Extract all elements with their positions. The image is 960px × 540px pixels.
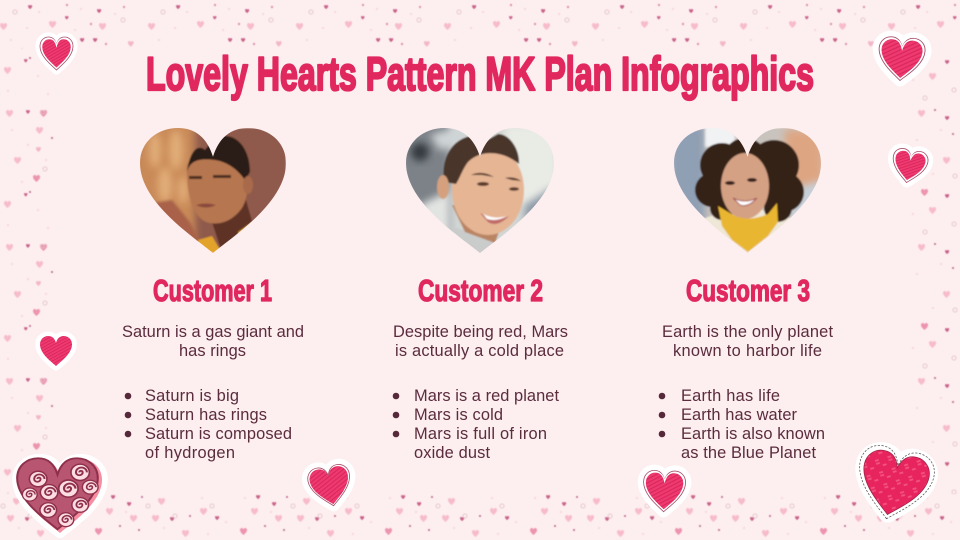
icon: sticker heart bottom right	[850, 442, 938, 527]
icon: sticker heart top left	[40, 37, 73, 70]
description: customer 3: known to harbor life	[673, 342, 822, 360]
description: customer 2	[393, 323, 568, 360]
spirals	[22, 464, 98, 527]
icon: sticker heart bottom center left	[306, 463, 354, 509]
bullet list: customer 3: Earth has life	[681, 387, 780, 405]
bullet list: customer 1: Saturn is composed	[145, 425, 292, 443]
description: customer 1: has rings	[179, 342, 246, 360]
description: customer 1	[122, 323, 304, 360]
icon: sticker heart left middle	[40, 336, 72, 366]
bullet list: customer 2: Mars is cold	[414, 406, 503, 424]
bullet list: customer 1: Saturn has rings	[145, 406, 267, 424]
bullet list: customer 2: Mars is a red planet	[414, 387, 559, 405]
photo: customer 2	[406, 128, 554, 253]
bullet list: customer 2: oxide dust	[414, 444, 490, 462]
bullet list: customer 2: Mars is full of iron	[414, 425, 547, 443]
panel: customer 1	[122, 120, 304, 462]
bullet list: customer 1	[125, 387, 292, 462]
panel: customer 3	[659, 125, 833, 462]
bullet list: customer 3	[659, 387, 825, 462]
heading: customer 2: Customer 2	[418, 273, 543, 308]
description: customer 3	[662, 323, 833, 360]
photo: customer 3	[670, 125, 823, 255]
icon: sticker heart top right	[877, 36, 926, 82]
description: customer 1: Saturn is a gas giant and	[122, 323, 304, 341]
bullet list: customer 3: Earth is also known	[681, 425, 825, 443]
description: customer 2: is actually a cold place	[395, 342, 564, 360]
heading: customer 3: Customer 3	[686, 273, 810, 308]
description: customer 2: Despite being red, Mars	[393, 323, 568, 341]
bullet list: customer 3: Earth has water	[681, 406, 798, 424]
panel: customer 2	[393, 120, 568, 462]
description: customer 3: Earth is the only planet	[662, 323, 833, 341]
icon: sticker heart right	[889, 147, 929, 186]
bullet list: customer 3: as the Blue Planet	[681, 444, 816, 462]
icon: sticker heart bottom center right	[643, 470, 686, 512]
bullet list: customer 1: of hydrogen	[145, 444, 235, 462]
photo: customer 1	[140, 128, 286, 253]
bullet list: customer 1: Saturn is big	[145, 387, 239, 405]
heading: customer 1: Customer 1	[153, 273, 272, 308]
bullet list: customer 2	[393, 387, 559, 462]
icon: spiral heart bottom left	[17, 458, 102, 533]
